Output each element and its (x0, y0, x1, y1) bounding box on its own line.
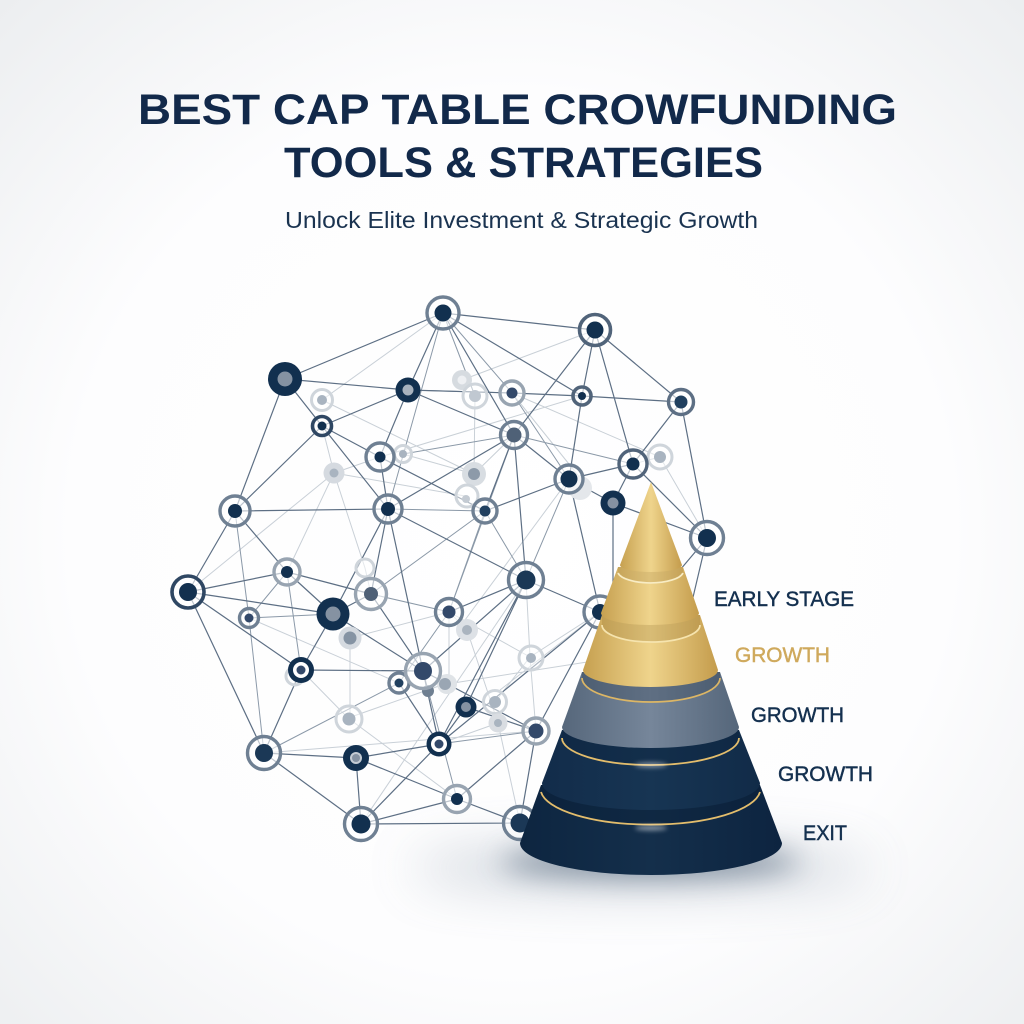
medium connections (235, 313, 633, 799)
tier: exit (520, 785, 782, 875)
stage labels: EXIT (803, 822, 847, 845)
tier: growth slate (562, 672, 739, 748)
tier: growth gold (583, 615, 718, 687)
faint connections (188, 313, 707, 824)
solid nodes (268, 362, 626, 771)
light background nodes (286, 370, 672, 732)
title: TOOLS & STRATEGIES (284, 139, 763, 187)
stage labels: GROWTH (735, 644, 830, 667)
title: BEST CAP TABLE CROWFUNDING (138, 86, 897, 134)
network diagram (172, 297, 724, 840)
stage labels: GROWTH (778, 763, 873, 786)
subtitle: Unlock Elite Investment & Strategic Growth (285, 207, 758, 233)
stage labels: GROWTH (751, 704, 844, 727)
tier: growth navy (542, 730, 760, 810)
stage labels (714, 588, 873, 845)
tiered cone (520, 482, 782, 875)
stage labels: EARLY STAGE (714, 588, 854, 611)
title (138, 86, 897, 187)
ground shadow (410, 846, 870, 890)
tier: tip (620, 482, 682, 572)
tier: early stage gold (601, 567, 699, 625)
strong connections (188, 313, 707, 824)
ringed nodes (172, 297, 724, 840)
